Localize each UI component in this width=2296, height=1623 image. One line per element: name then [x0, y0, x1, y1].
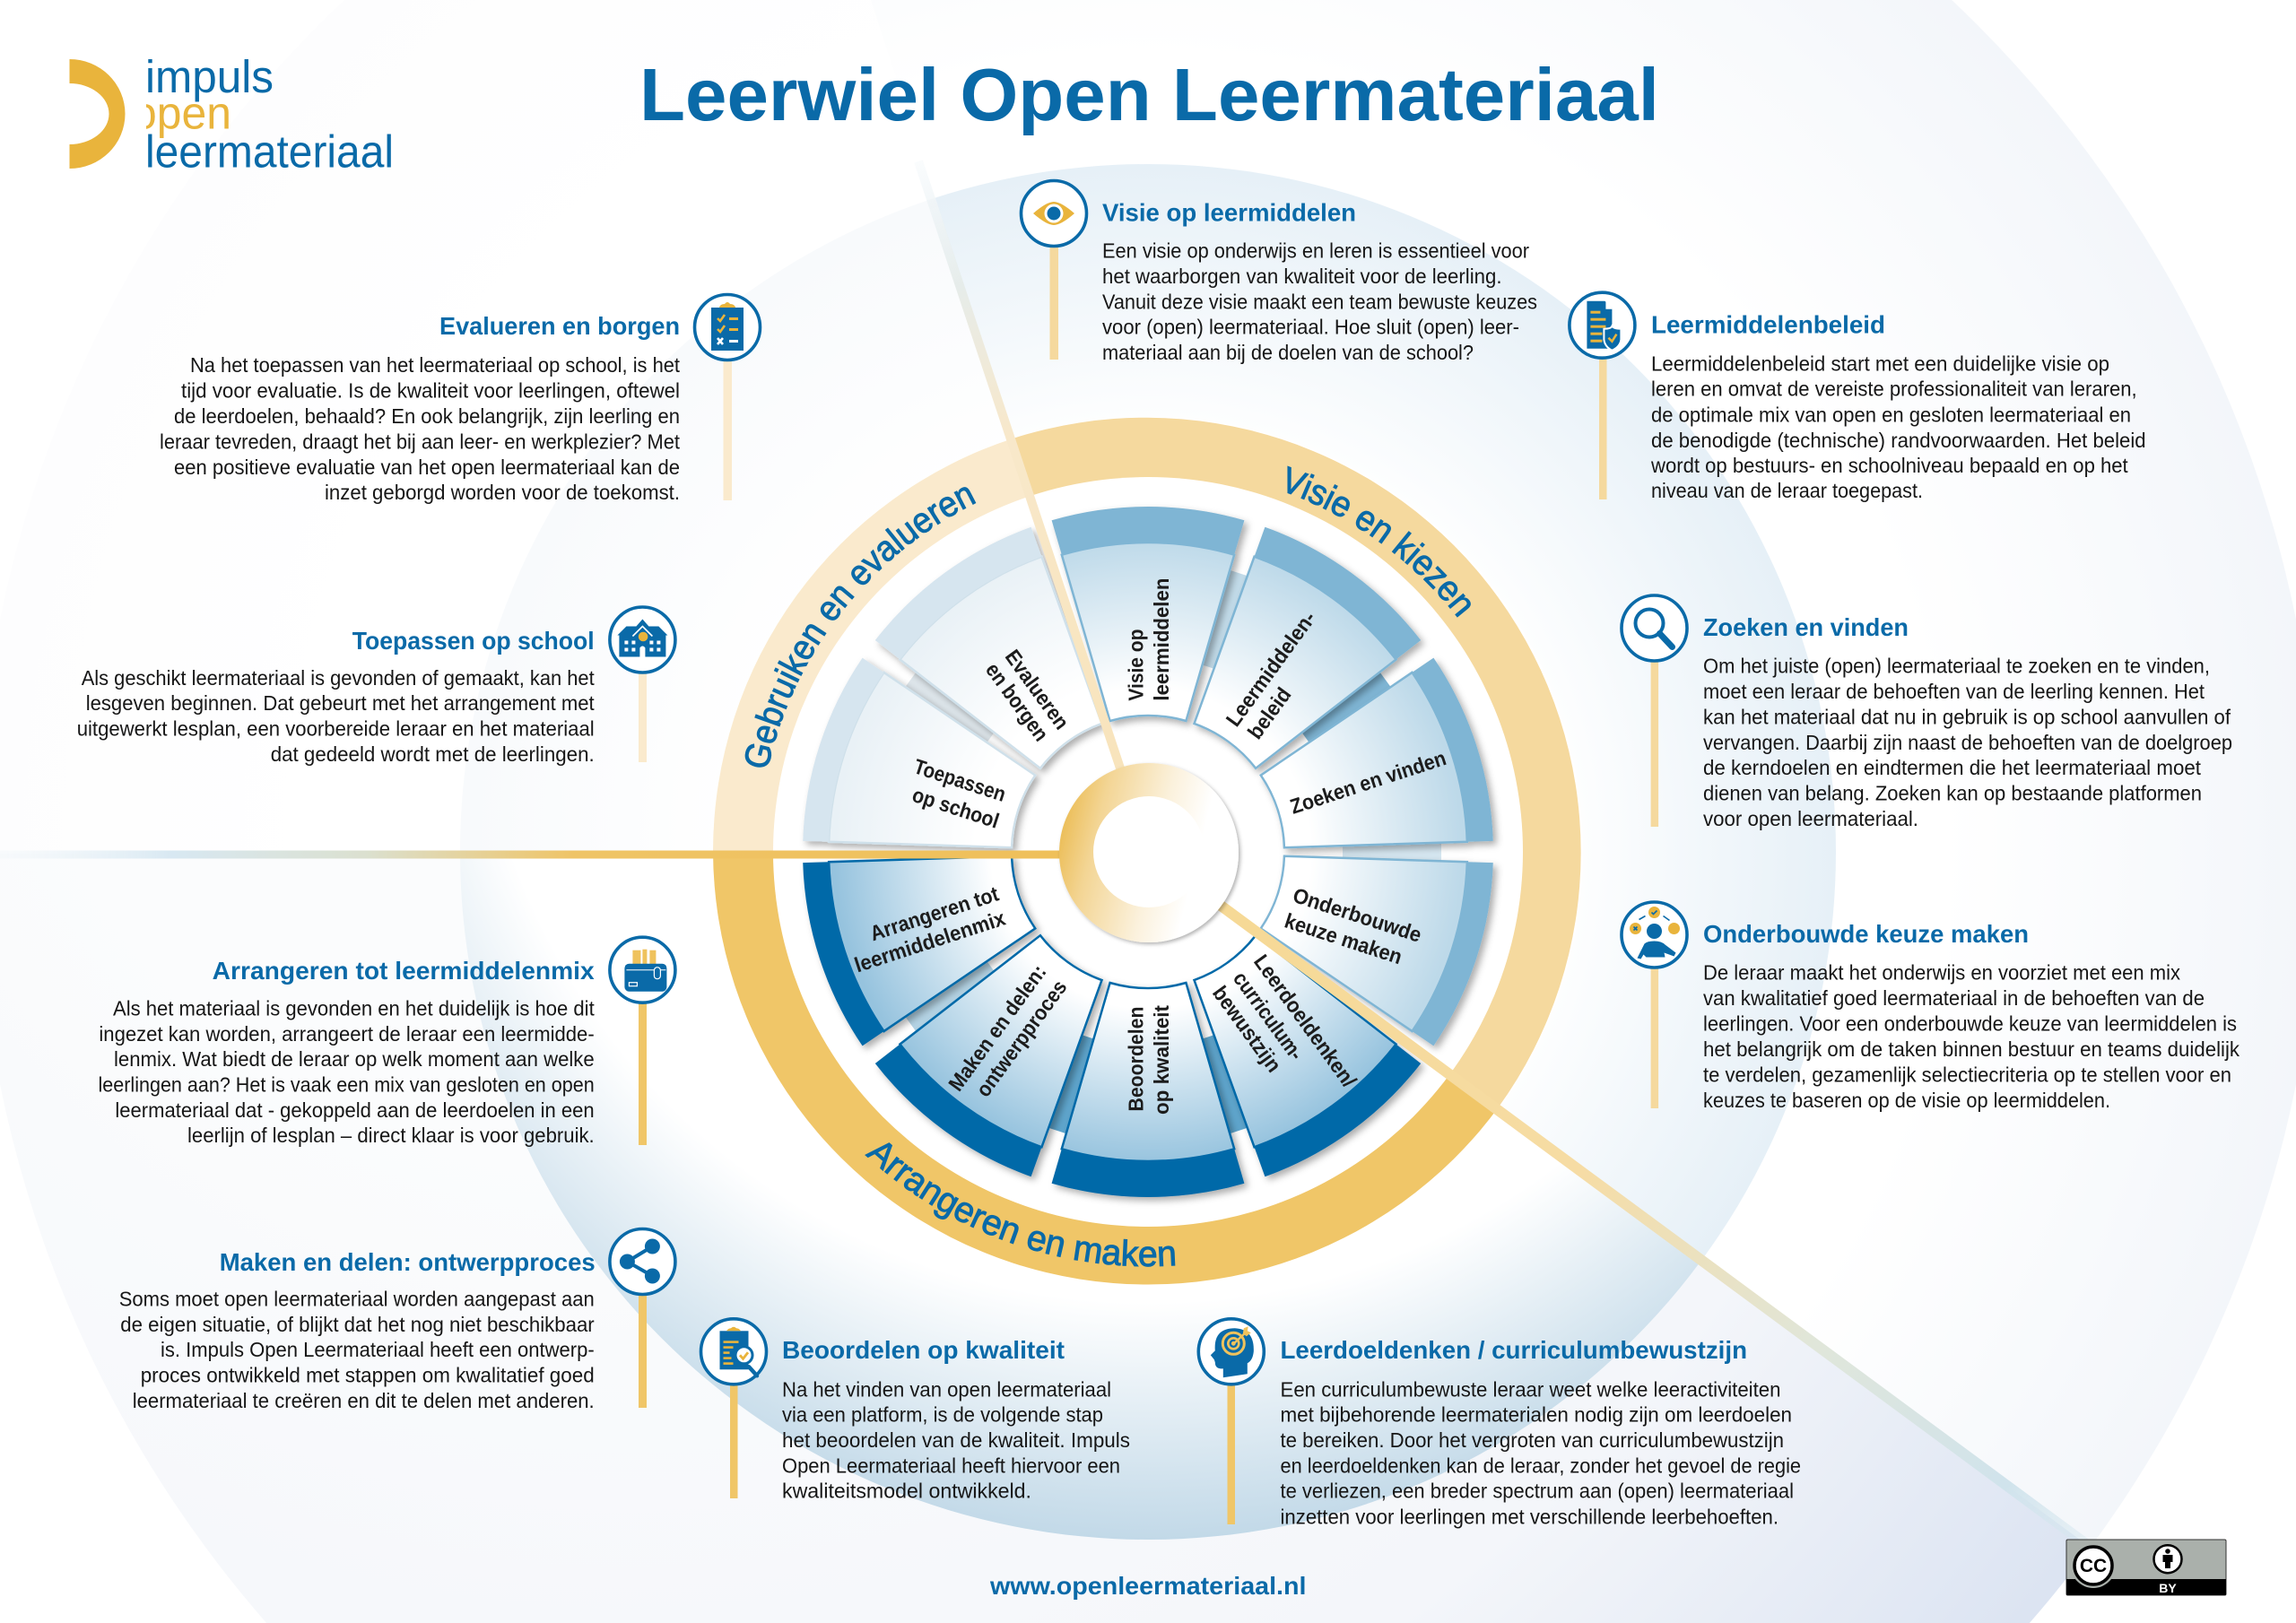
body text: Als geschikt leermateriaal is gevonden of gemaakt, kan het: [82, 666, 595, 690]
body text: te verliezen, een breder spectrum aan (open) leermateriaal: [1281, 1480, 1794, 1503]
ring label: Arrangeren en maken: Arrangeren en maken: [865, 1142, 1175, 1267]
title: Leerwiel Open Leermateriaal: [639, 53, 1659, 136]
wheel: [27, 178, 2088, 1539]
label: Leerdoeldenken/ curriculum-bewustzijn: curriculum-: [1229, 968, 1309, 1064]
panel: Zoeken en vinden: [1622, 595, 2232, 830]
heading: Onderbouwde keuze maken: [1703, 920, 2029, 948]
body text: de benodigde (technische) randvoorwaarden. Het beleid: [1651, 429, 2146, 452]
icon: CC BY licence badge: CC: [2080, 1556, 2107, 1576]
body text: kwaliteitsmodel ontwikkeld.: [782, 1480, 1031, 1503]
body text: is. Impuls Open Leermateriaal heeft een ontwerp-: [161, 1338, 595, 1361]
ring label: Visie en kiezen: Visie en kiezen: [1287, 466, 1471, 618]
segment: Evalueren en borgen: [867, 516, 1149, 803]
divider: Gebruiken / Arrangeren: [0, 850, 1148, 859]
icon: clipboard with magnifier: [701, 1319, 766, 1384]
body text: leren en omvat de vereiste professionaliteit van leraren,: [1651, 378, 2137, 401]
body text: [119, 1288, 595, 1412]
body text: Open Leermateriaal heeft hiervoor een: [782, 1454, 1120, 1477]
body text: leerlingen aan? Het is vaak een mix van gesloten en open: [99, 1072, 595, 1096]
body text: lenmix. Wat biedt de leraar op welk moment aan welke: [114, 1047, 595, 1071]
body text: [1703, 961, 2239, 1112]
icon: document with shield: [1570, 292, 1635, 358]
body text: leermateriaal dat - gekoppeld aan de leerdoelen in een: [115, 1098, 595, 1122]
heading: Zoeken en vinden: [1703, 613, 1909, 641]
segment labels: [852, 578, 1448, 1115]
heading: Evalueren en borgen: [439, 312, 680, 340]
segment: Visie op leermiddelen: [1052, 507, 1244, 721]
icon: school building: [610, 607, 675, 673]
body text: met bijbehorende leermaterialen nodig zijn om leerdoelen: [1281, 1403, 1792, 1427]
body text: leraar tevreden, draagt het bij aan leer- en werkplezier? Met: [160, 430, 680, 454]
heading: Leermiddelenbeleid: [1651, 311, 1885, 339]
body text: de optimale mix van open en gesloten leermateriaal en: [1651, 404, 2131, 427]
body text: [782, 1377, 1130, 1503]
body text: lesgeven beginnen. Dat gebeurt met het arrangement met: [86, 691, 595, 715]
label: Arrangeren tot leermiddelenmix: Arrangeren tot: [867, 881, 1002, 945]
body text: en leerdoeldenken kan de leraar, zonder het gevoel de regie: [1281, 1454, 1801, 1477]
body text: te verdelen, gezamenlijk selectiecriteria op te stellen voor en: [1703, 1063, 2231, 1087]
label: Leermiddelen-beleid: Leermiddelen-: [1222, 607, 1320, 731]
icon: share nodes: [610, 1228, 675, 1295]
label: Onderbouwde keuze maken: [1282, 883, 1424, 968]
heading: Leerdoeldenken / curriculumbewustzijn: [1281, 1336, 1747, 1364]
wheel segments: [790, 507, 1506, 1197]
heading: Visie op leermiddelen: [1102, 199, 1356, 227]
label: Toepassen op school: Toepassen: [911, 754, 1009, 806]
panel: Leermiddelenbeleid: [1570, 292, 2146, 502]
body text: kan het materiaal dat nu in gebruik is op school aanvullen of: [1703, 705, 2231, 728]
body text: dienen van belang. Zoeken kan op bestaande platformen: [1703, 782, 2202, 805]
icon: CC BY licence badge: [2066, 1540, 2226, 1595]
heading: Beoordelen op kwaliteit: [782, 1336, 1065, 1364]
logo word: open: open: [132, 88, 231, 138]
label: Leermiddelen-beleid: beleid: [1243, 683, 1296, 743]
label: Maken en delen: ontwerpproces: ontwerpproces: [971, 976, 1072, 1101]
panel: Visie op leermiddelen: [1021, 181, 1537, 364]
body text: leermateriaal te creëren en dit te delen met anderen.: [133, 1389, 595, 1412]
body text: de kerndoelen en eindtermen die het leermateriaal moet: [1703, 756, 2201, 779]
website link text: www.openleermateriaal.nl: [989, 1572, 1306, 1600]
label: Toepassen op school: [909, 754, 1009, 833]
body text: [77, 666, 595, 766]
logo half ring: [70, 59, 126, 169]
label: Zoeken en vinden: Zoeken en vinden: [1287, 746, 1448, 819]
label: Arrangeren tot leermiddelenmix: leermiddelenmix: [852, 907, 1008, 976]
panel: Arrangeren tot leermiddelenmix: [99, 937, 675, 1147]
logo word: leermateriaal: leermateriaal: [145, 126, 394, 178]
logo: impuls open leermateriaal: [70, 59, 391, 169]
panel: Toepassen op school: [77, 607, 675, 766]
label: Maken en delen: ontwerpproces: Maken en delen:: [944, 960, 1051, 1095]
label: Onderbouwde keuze maken: Onderbouwde: [1290, 883, 1424, 947]
label: Visie op leermiddelen: [1125, 578, 1173, 701]
icon: head with target: [1198, 1319, 1264, 1384]
label: Leerdoeldenken/ curriculum-bewustzijn: Leerdoeldenken/: [1249, 950, 1361, 1092]
body text: wordt op bestuurs- en schoolniveau bepaald en op het: [1650, 454, 2128, 477]
body text: [99, 997, 595, 1147]
segment: Zoeken en vinden: [1243, 654, 1506, 903]
divider: Gebruiken / Visie: [918, 161, 1148, 852]
body text: tijd voor evaluatie. Is de kwaliteit voor leerlingen, oftewel: [181, 378, 680, 402]
body text: [1703, 655, 2232, 830]
body text: het belangrijk om de taken binnen bestuur en teams duidelijk: [1703, 1037, 2239, 1061]
body text: [1281, 1377, 1801, 1528]
body text: Vanuit deze visie maakt een team bewuste keuzes: [1102, 290, 1537, 313]
segment: Leermiddelenbeleid: [1147, 516, 1429, 803]
body text: uitgewerkt lesplan, een voorbereide leraar en het materiaal: [77, 716, 595, 740]
body text: materiaal aan bij de doelen van de school?: [1102, 341, 1474, 364]
segment: Maken en delen: [867, 901, 1149, 1188]
body text: Na het toepassen van het leermateriaal op school, is het: [190, 353, 680, 377]
heading: Toepassen op school: [352, 627, 595, 655]
body text: Als het materiaal is gevonden en het duidelijk is hoe dit: [113, 997, 595, 1020]
body text: voor (open) leermateriaal. Hoe sluit (open) leer-: [1102, 316, 1519, 339]
label: Leerdoeldenken/ curriculum-bewustzijn: [1208, 950, 1361, 1092]
icon: clipboard checklist: [694, 294, 761, 360]
body text: [160, 353, 680, 504]
icon: magnifier: [1622, 595, 1687, 661]
segment: Arrangeren tot leermiddelenmix: [790, 801, 1053, 1050]
panel: Evalueren en borgen: [160, 294, 761, 504]
segment: Onderbouwde keuze maken: [1243, 801, 1506, 1050]
logo word: impuls: impuls: [145, 51, 274, 102]
body text: De leraar maakt het onderwijs en voorziet met een mix: [1703, 961, 2180, 985]
label: Beoordelen op kwaliteit: op kwaliteit: [1150, 1005, 1173, 1115]
body text: niveau van de leraar toegepast.: [1651, 479, 1923, 502]
label: Evalueren en borgen: en borgen: [981, 658, 1053, 745]
body text: het beoordelen van de kwaliteit. Impuls: [782, 1428, 1130, 1452]
body text: Om het juiste (open) leermateriaal te zoeken en te vinden,: [1703, 655, 2210, 678]
body text: moet een leraar de behoeften van de leerling kennen. Het: [1703, 680, 2205, 703]
body text: Een curriculumbewuste leraar weet welke leeractiviteiten: [1281, 1377, 1781, 1401]
body text: proces ontwikkeld met stappen om kwalitatief goed: [141, 1363, 595, 1386]
heading: Arrangeren tot leermiddelenmix: [213, 957, 595, 985]
body text: dat gedeeld wordt met de leerlingen.: [271, 742, 595, 766]
panel: Onderbouwde keuze maken: [1622, 902, 2239, 1112]
body text: leerlingen. Voor een onderbouwde keuze van leermiddelen is: [1703, 1012, 2237, 1036]
body text: Na het vinden van open leermateriaal: [782, 1377, 1111, 1401]
segment: Leerdoeldenken: [1147, 901, 1429, 1188]
body text: [1650, 352, 2146, 502]
heading: Maken en delen: ontwerpproces: [220, 1248, 596, 1276]
label: Visie op leermiddelen: Visie op: [1125, 629, 1148, 701]
label: Visie op leermiddelen: leermiddelen: [1150, 578, 1173, 701]
body text: de leerdoelen, behaald? En ook belangrijk, zijn leerling en: [174, 404, 680, 428]
panel: Maken en delen: ontwerpproces: [119, 1228, 675, 1412]
connector pieces behind the segment gaps: [903, 569, 1441, 1134]
body text: Een visie op onderwijs en leren is essentieel voor: [1102, 239, 1529, 263]
panel: Leerdoeldenken / curriculumbewustzijn: [1198, 1319, 1801, 1528]
icon: person with choices: [1622, 902, 1687, 968]
segment: Beoordelen op kwaliteit: [1052, 983, 1244, 1197]
body text: via een platform, is de volgende stap: [782, 1403, 1103, 1427]
body text: inzetten voor leerlingen met verschillende leerbehoeften.: [1281, 1505, 1779, 1528]
outer ring: [713, 417, 1583, 1287]
label: Onderbouwde keuze maken: keuze maken: [1282, 909, 1405, 968]
body text: leerlijn of lesplan – direct klaar is voor gebruik.: [187, 1124, 595, 1147]
body text: het waarborgen van kwaliteit voor de leerling.: [1102, 265, 1501, 288]
body text: voor open leermateriaal.: [1703, 807, 1918, 830]
label: Beoordelen op kwaliteit: [1125, 1005, 1173, 1115]
label: Leerdoeldenken/ curriculum-bewustzijn: bewustzijn: [1208, 982, 1286, 1077]
body text: [1102, 239, 1537, 364]
centre hub: [1059, 763, 1239, 942]
ring label: Gebruiken en evalueren: Gebruiken en evalueren: [744, 487, 976, 768]
body text: een positieve evaluatie van het open leermateriaal kan de: [174, 456, 680, 479]
body text: inzet geborgd worden voor de toekomst.: [325, 481, 680, 504]
panel: Beoordelen op kwaliteit: [701, 1319, 1130, 1503]
body text: van kwalitatief goed leermateriaal in de behoeften van de: [1703, 986, 2205, 1010]
divider: Visie / Arrangeren: [1148, 852, 2103, 1557]
body text: Leermiddelenbeleid start met een duidelijke visie op: [1651, 352, 2109, 375]
body text: Soms moet open leermateriaal worden aangepast aan: [119, 1288, 595, 1311]
icon: eye: [1021, 181, 1087, 246]
segment: Toepassen op school: [790, 654, 1053, 903]
label: Toepassen op school: op school: [909, 783, 1002, 833]
body text: te bereiken. Door het vergroten van curriculumbewustzijn: [1281, 1428, 1784, 1452]
icon: CC BY licence badge: BY: [2159, 1581, 2177, 1595]
label: Beoordelen op kwaliteit: Beoordelen: [1125, 1006, 1148, 1112]
label: Evalueren en borgen: Evalueren: [1001, 646, 1074, 733]
body text: keuzes te baseren op de visie op leermiddelen.: [1703, 1089, 2110, 1112]
icon: pencil case: [610, 937, 675, 1002]
body text: de eigen situatie, of blijkt dat het nog niet beschikbaar: [120, 1313, 595, 1336]
body text: vervangen. Daarbij zijn naast de behoeften van de doelgroep: [1703, 731, 2232, 754]
body text: ingezet kan worden, arrangeert de leraar een leermidde-: [99, 1022, 595, 1046]
